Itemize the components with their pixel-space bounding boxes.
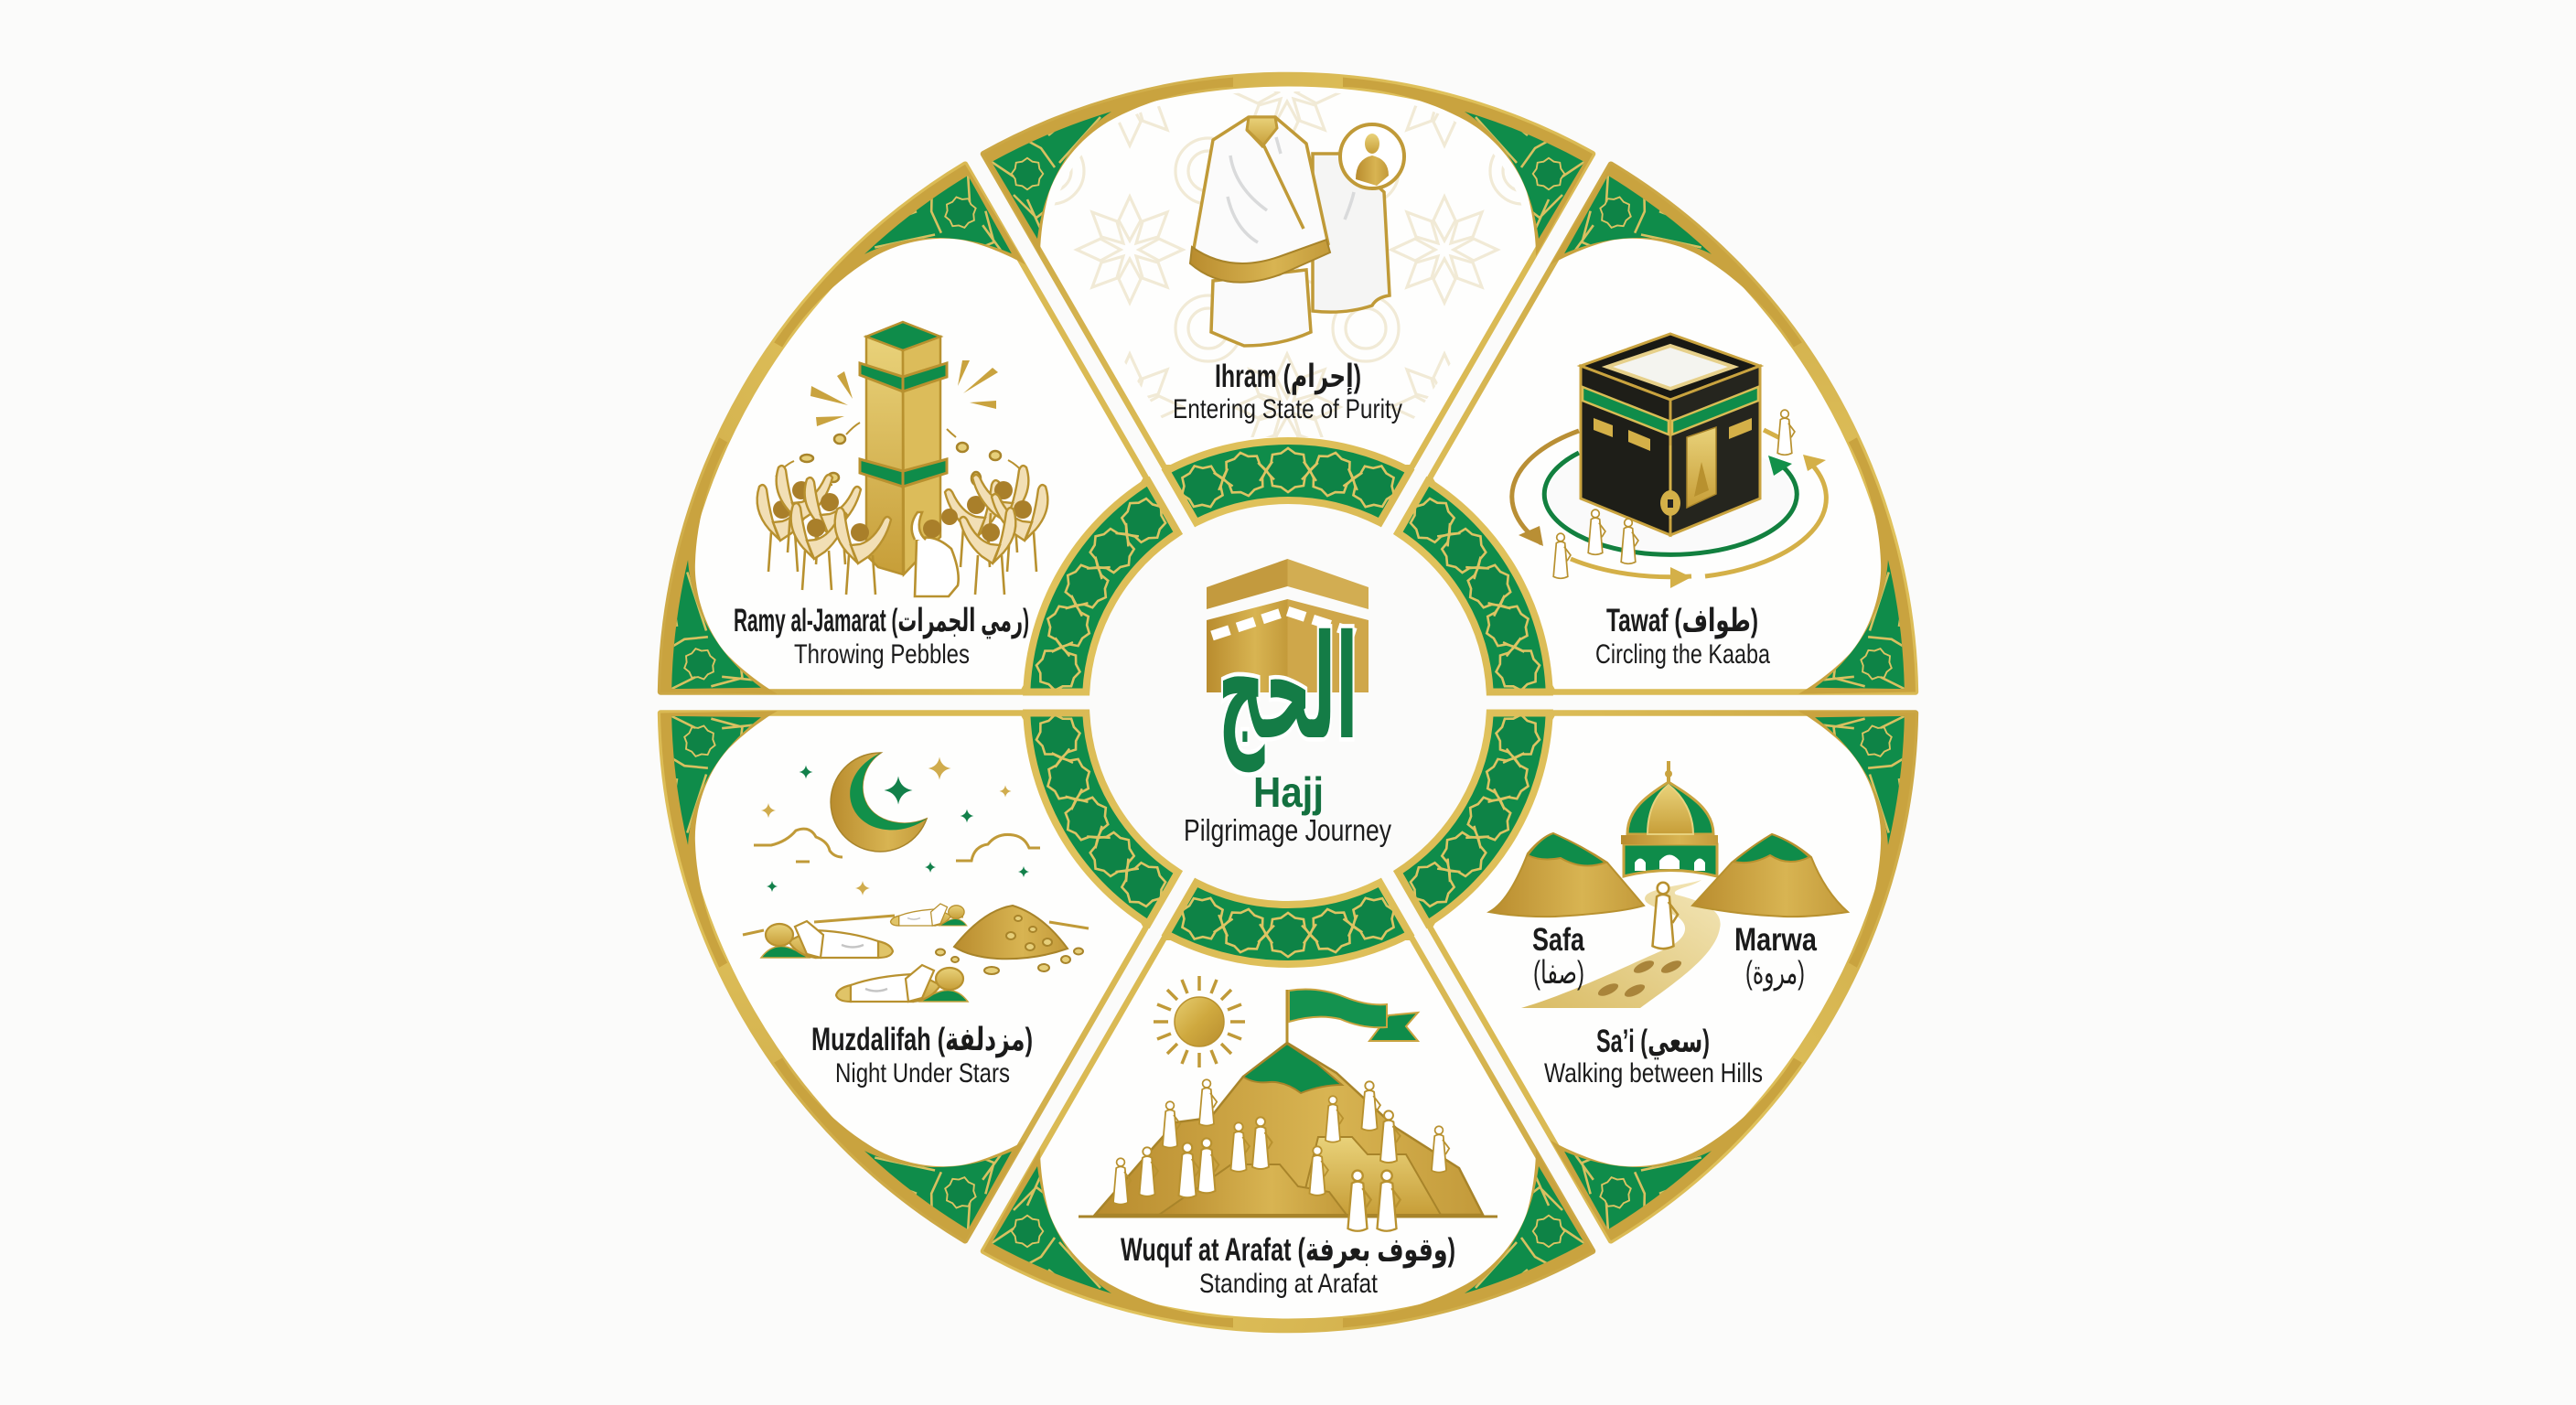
label: Safa Arabic: (صفا) (1533, 955, 1584, 991)
label: Marwa: Marwa (1734, 922, 1817, 958)
panel: Muzdalifah (592, 529, 1284, 1280)
sublabel: Arafat: Standing at Arafat (1199, 1269, 1379, 1299)
Arabic calligraphy: Al-Hajj: الحج (1218, 604, 1358, 773)
frame: Arafat sector (983, 883, 1593, 1330)
label: Tawaf: Tawaf (طواف) (1606, 603, 1758, 639)
title: Hajj: Hajj (1253, 768, 1324, 816)
sublabel: Ihram: Entering State of Purity (1173, 394, 1402, 424)
panel: Sa'i (1292, 529, 1984, 1280)
icon: Mount Arafat with sun, flag and pilgrims (1079, 976, 1497, 1231)
panel: Tawaf (1292, 125, 1984, 876)
pattern: faint geometric background (1046, 91, 1530, 437)
label: Marwa Arabic: (مروة) (1745, 955, 1805, 992)
frame: Ramy sector (592, 125, 1284, 876)
icon: Kaaba with circling arrows (1512, 334, 1826, 588)
subtitle: Pilgrimage Journey: Pilgrimage Journey (1184, 813, 1391, 847)
icon: gold Kaaba (1207, 559, 1368, 692)
panel: Wuquf at Arafat (983, 883, 1593, 1330)
label: Muzdalifah: Muzdalifah (مزدلفة) (811, 1022, 1033, 1058)
label: Ihram: Ihram (إحرام) (1215, 359, 1361, 395)
center hub (1184, 559, 1391, 847)
sublabel: Muzdalifah: Night Under Stars (835, 1058, 1010, 1089)
label: Safa: Safa (1532, 922, 1584, 958)
icon: Jamarat pillar with pilgrims throwing pebbles (757, 322, 1047, 596)
sublabel: Sa'i: Walking between Hills (1544, 1058, 1763, 1089)
panel: Ramy al-Jamarat (592, 125, 1284, 876)
frame: Muzdalifah sector (592, 529, 1284, 1280)
icon: ihram garments (1190, 117, 1404, 346)
label: Sa'i: Sa’i (سعي) (1596, 1024, 1710, 1060)
icon: Safa and Marwa hills with dome and path (1489, 761, 1848, 1008)
frame: Ihram sector (983, 75, 1593, 522)
frame: Tawaf sector (1292, 125, 1984, 876)
sublabel: Tawaf: Circling the Kaaba (1595, 639, 1770, 670)
panel: Ihram (983, 75, 1593, 522)
frame: Sa'i sector (1292, 529, 1984, 1280)
label: Wuquf at Arafat: Wuquf at Arafat (وقوف بعرفة) (1121, 1232, 1455, 1269)
sublabel: Ramy: Throwing Pebbles (794, 639, 970, 670)
label: Ramy al-Jamarat: Ramy al-Jamarat (رمي الجمرات) (734, 603, 1029, 639)
icon: crescent, stars and sleeping pilgrims (743, 753, 1089, 1002)
